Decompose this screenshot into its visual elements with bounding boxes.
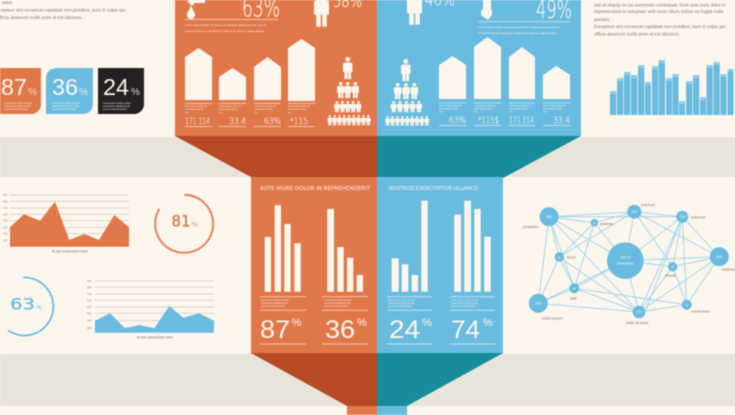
bar chart: orange right xyxy=(327,209,363,292)
text block: blue intro xyxy=(478,22,570,35)
panel: upper blue column xyxy=(377,0,581,136)
area chart: blue: 200 xyxy=(87,326,92,330)
area chart: blue: 500 xyxy=(87,305,92,309)
text block: top right: reprehenderit in voluptate velit esse cillum dolore eu fugiat nulla xyxy=(594,9,724,14)
area chart: blue: 600 xyxy=(87,298,92,302)
house captions: blue: sed xyxy=(509,112,513,114)
network diagram: 535 xyxy=(535,302,541,306)
stat: 87% panel: Lorem ipsum dolor sit amet xyxy=(261,299,289,302)
stat: 36% panel: 36 xyxy=(325,316,355,344)
icon: pencil xyxy=(481,0,492,20)
house captions: blue xyxy=(439,103,570,126)
funnel: lower dark orange xyxy=(251,353,377,406)
tile: 87%: 87 xyxy=(1,74,27,100)
house captions: blue: consectetur elit do xyxy=(509,108,528,110)
house captions: orange: consectetur elit do xyxy=(185,108,204,111)
ring gauge: 81% xyxy=(155,195,213,253)
panel: upper orange column xyxy=(175,0,377,136)
network diagram: 19 xyxy=(593,221,596,225)
area chart: orange: 400 xyxy=(3,225,8,229)
tile: 36%: sed do eiusmod tempor xyxy=(52,108,76,111)
tile: 87%: % xyxy=(28,87,37,98)
house captions: blue: Lorem ipsum dolor sit xyxy=(543,104,565,108)
tile: 36%: Lorem ipsum dolor sit amet xyxy=(52,102,80,105)
stat: 24% panel: sed do eiusmod tempor xyxy=(388,305,412,308)
text block: blue intro: Lorem ipsum dolor sit amet consectetur adipiscing elit sed do xyxy=(478,25,560,29)
house captions: orange: consectetur elit do xyxy=(254,108,273,111)
network diagram: 565 xyxy=(546,215,552,219)
stat: 36% panel: Lorem ipsum dolor sit amet xyxy=(324,299,352,302)
bar chart: blue left xyxy=(392,201,428,292)
network diagram: lacus xyxy=(567,256,576,260)
stat tiles xyxy=(0,68,144,114)
stat: 87% panel: % xyxy=(292,317,302,329)
house captions: orange xyxy=(185,104,315,127)
stat: 74% panel: sed do eiusmod tempor xyxy=(451,305,475,308)
heading: orange panel: AUTE IRURE DOLOR IN REPREHENDERIT xyxy=(260,186,371,192)
network diagram: aliquip xyxy=(665,274,676,278)
network diagram xyxy=(523,203,735,325)
house captions: orange: Lorem ipsum dolor sit xyxy=(185,105,207,108)
area chart: orange: 800 xyxy=(3,199,8,203)
area chart: orange xyxy=(3,193,129,254)
house captions: orange: sed xyxy=(185,112,189,114)
area chart: blue: 400 xyxy=(87,311,92,315)
stat: 24% panel xyxy=(387,297,432,344)
stat: 24% panel: consectetur adipisicing elit xyxy=(388,302,415,305)
network diagram: 272 xyxy=(636,310,642,314)
area chart: blue: 700 xyxy=(87,292,92,296)
stat: 74% panel: consectetur adipisicing elit xyxy=(451,302,478,305)
tile: 24%: Lorem ipsum dolor sit amet xyxy=(103,102,131,105)
network diagram: euismod xyxy=(641,203,655,207)
area chart: blue: 800 xyxy=(87,285,92,289)
text block: top right: officia deserunt mollit anim id est laborum. xyxy=(594,32,680,36)
house captions: blue: consectetur elit do xyxy=(543,108,562,110)
text block: top right: pariatur. xyxy=(594,17,611,22)
area chart: orange: 200 xyxy=(3,238,8,242)
network diagram: fermentum xyxy=(617,262,634,266)
funnel stem: blue xyxy=(377,406,407,415)
text block: orange intro xyxy=(185,20,278,33)
stat: 36% panel: % xyxy=(357,317,367,329)
icon: water tap and drop xyxy=(187,0,205,19)
icon: person blue xyxy=(407,0,422,25)
stat: 87% panel xyxy=(260,297,306,344)
house captions: orange: 171 114 xyxy=(185,117,210,127)
people pyramid: orange xyxy=(328,57,371,125)
house captions: blue: Lorem ipsum dolor sit xyxy=(474,104,496,108)
stat: 87% panel: sed do eiusmod tempor xyxy=(261,305,285,308)
network diagram: lorem ipsum xyxy=(542,316,562,320)
house captions: blue: sed xyxy=(474,112,478,114)
area chart: blue xyxy=(87,279,214,340)
house captions: blue: 33.4 xyxy=(553,116,570,126)
text block: orange intro: Lorem ipsum dolor sit amet consectetur adipiscing elit sed do xyxy=(185,23,267,27)
stat: 24% panel: 24 xyxy=(389,316,420,344)
tile: 24%: 24 xyxy=(103,74,129,100)
house chart: orange xyxy=(185,39,315,101)
tile: 36%: consectetur adipisicing elit xyxy=(52,105,79,108)
ring gauge: 63%: 63 xyxy=(10,294,35,313)
funnel: lower teal xyxy=(377,353,503,406)
panel: lower blue column xyxy=(377,177,503,354)
network diagram: velit xyxy=(570,296,577,300)
network diagram: dolor sit amet xyxy=(626,321,648,325)
people pyramid: blue xyxy=(385,59,429,126)
bar chart: top right xyxy=(610,60,734,115)
house captions: blue: Lorem ipsum dolor sit xyxy=(439,104,461,108)
house captions: blue: 63% xyxy=(449,116,466,126)
house captions: orange: consectetur elit do xyxy=(288,108,307,111)
tile: 87%: Lorem ipsum dolor sit amet xyxy=(4,102,32,105)
tile: 87%: sed do eiusmod tempor xyxy=(4,108,28,111)
network diagram: Sed ut xyxy=(620,256,630,260)
network diagram: 36 xyxy=(685,303,689,307)
area chart: orange: 600 xyxy=(3,212,8,216)
heading: blue panel: NOSTRUD EXERCITATION ULLAMCO xyxy=(389,186,479,192)
stat: 87% panel: consectetur adipisicing elit xyxy=(261,302,288,305)
text block: orange intro: eiusmod tempor incididunt ut labore et dolore magna aliqua xyxy=(185,29,264,33)
funnel stem: orange xyxy=(347,406,377,415)
stat: 74% panel xyxy=(450,297,495,344)
network diagram: 565 xyxy=(716,255,722,259)
network diagram: 80 xyxy=(671,265,675,269)
text block: blue intro: eiusmod tempor incididunt ut labore et dolore magna aliqua xyxy=(478,31,557,35)
network diagram: euismod xyxy=(691,216,705,220)
house captions: orange: sed xyxy=(288,112,292,114)
ring gauge: 63% xyxy=(8,277,53,335)
house captions: orange: Lorem ipsum dolor sit xyxy=(288,105,310,108)
network diagram: consectetur xyxy=(691,310,711,314)
ring gauge: 63%: % xyxy=(36,303,42,311)
bar chart: blue right xyxy=(454,201,491,292)
stat: 24% panel: % xyxy=(422,317,432,329)
house captions: blue: consectetur elit do xyxy=(474,108,493,110)
tile: 36%: 36 xyxy=(52,74,78,100)
ring gauge: 81%: % xyxy=(192,221,198,229)
area chart: blue: 300 xyxy=(87,319,92,323)
tile: 24%: consectetur adipisicing elit xyxy=(103,105,130,108)
icon: person orange xyxy=(314,0,329,27)
network diagram: phasellus xyxy=(523,225,539,229)
text block: top left: labor. xyxy=(2,0,13,5)
house captions: blue: Lorem ipsum dolor sit xyxy=(509,104,531,108)
stat: 74% panel: Lorem ipsum dolor sit amet xyxy=(451,299,479,302)
panel: lower orange column xyxy=(251,177,377,354)
area chart: blue: fk non consectetur enim xyxy=(137,336,173,340)
tile: 24%: sed do eiusmod tempor xyxy=(103,108,127,111)
house captions: blue: consectetur elit do xyxy=(439,108,458,110)
area chart: blue: 900 xyxy=(87,279,92,283)
funnel: upper teal xyxy=(377,136,581,178)
network diagram: pulvinar xyxy=(600,222,614,226)
house captions: blue: sed xyxy=(439,112,443,114)
stat: 36% panel: consectetur adipisicing elit xyxy=(324,302,351,305)
house captions: orange: Lorem ipsum dolor sit xyxy=(254,105,276,108)
tile: 36%: % xyxy=(79,87,88,98)
area chart: orange: 300 xyxy=(3,232,8,236)
house captions: orange: sed xyxy=(254,112,258,114)
house captions: blue: *115$ xyxy=(478,116,499,126)
funnel: upper dark orange xyxy=(175,136,377,177)
house captions: orange: Lorem ipsum dolor sit xyxy=(219,105,241,108)
stat: 74% panel: % xyxy=(483,317,493,329)
area chart: orange: 500 xyxy=(3,219,8,223)
area chart: orange: 900 xyxy=(3,193,8,197)
area chart: orange: 700 xyxy=(3,206,8,210)
tile: 24% xyxy=(98,68,144,114)
ring gauge: 81%: 81 xyxy=(172,212,190,231)
house captions: orange: consectetur elit do xyxy=(219,108,238,111)
house captions: blue: 171 114 xyxy=(509,116,534,126)
house captions: orange: *115 xyxy=(290,117,308,127)
house chart: blue xyxy=(439,37,570,99)
text block: top right xyxy=(594,2,726,36)
house captions: orange: 33.4 xyxy=(229,117,246,127)
tile: 36% xyxy=(46,68,93,114)
stat: 36% panel xyxy=(322,297,368,344)
text block: top right: Excepteur sint occaecat cupidatat non proident, sunt in culpa qui xyxy=(594,24,725,29)
network diagram: 209 xyxy=(631,210,637,214)
area chart: orange: fk non consectetur enim xyxy=(52,250,88,254)
text block: top left xyxy=(0,0,125,20)
stat: 74% panel: 74 xyxy=(451,316,480,344)
network diagram: 253 xyxy=(679,215,685,219)
tile: 87%: consectetur adipisicing elit xyxy=(4,105,31,108)
stat: 36% panel: sed do eiusmod tempor xyxy=(324,305,348,308)
tile: 24%: % xyxy=(131,87,140,98)
house captions: orange: 63% xyxy=(264,117,281,127)
text block: top right: nisi ut aliquip ex ea commodo consequat. Duis aute irure dolor in xyxy=(594,2,726,8)
stat: 87% panel: 87 xyxy=(260,316,290,344)
house captions: blue: sed xyxy=(543,112,547,114)
bar chart: orange left xyxy=(265,205,301,292)
house captions: orange: sed xyxy=(219,112,223,114)
stat: 24% panel: Lorem ipsum dolor sit amet xyxy=(388,299,416,302)
network diagram: 99 xyxy=(573,287,576,291)
tile: 87% xyxy=(0,68,41,114)
network diagram: 45 xyxy=(558,255,561,259)
